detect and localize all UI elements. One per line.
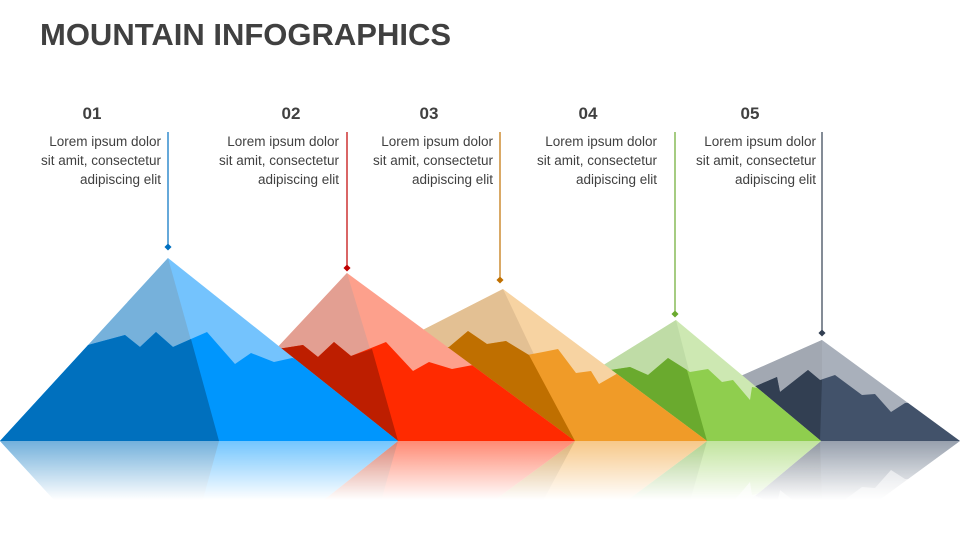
item 04: adipiscing elit (576, 172, 657, 187)
item 05 (696, 104, 826, 337)
item 04: sit amit, consectetur (537, 153, 658, 168)
item 05: sit amit, consectetur (696, 153, 817, 168)
item 03: Lorem ipsum dolor (381, 134, 494, 149)
item 05: 05 (741, 104, 759, 123)
item 01: Lorem ipsum dolor (49, 134, 162, 149)
item 03: 03 (420, 104, 438, 123)
item 01: adipiscing elit (80, 172, 161, 187)
title: MOUNTAIN INFOGRAPHICS (40, 17, 451, 52)
item 05: Lorem ipsum dolor (704, 134, 817, 149)
item 04 (537, 104, 679, 318)
item 03 (373, 104, 504, 284)
item 04: 04 (579, 104, 598, 123)
item 02: adipiscing elit (258, 172, 339, 187)
item 03: adipiscing elit (412, 172, 493, 187)
item 02 (219, 104, 351, 272)
reflection (0, 441, 960, 496)
item 02: 02 (282, 104, 300, 123)
item 05: adipiscing elit (735, 172, 816, 187)
item 01 (41, 104, 172, 251)
item 03: sit amit, consectetur (373, 153, 494, 168)
item 01: sit amit, consectetur (41, 153, 162, 168)
item 04: Lorem ipsum dolor (545, 134, 658, 149)
item 01: 01 (83, 104, 101, 123)
item 02: sit amit, consectetur (219, 153, 340, 168)
mountains (0, 250, 960, 450)
item 02: Lorem ipsum dolor (227, 134, 340, 149)
